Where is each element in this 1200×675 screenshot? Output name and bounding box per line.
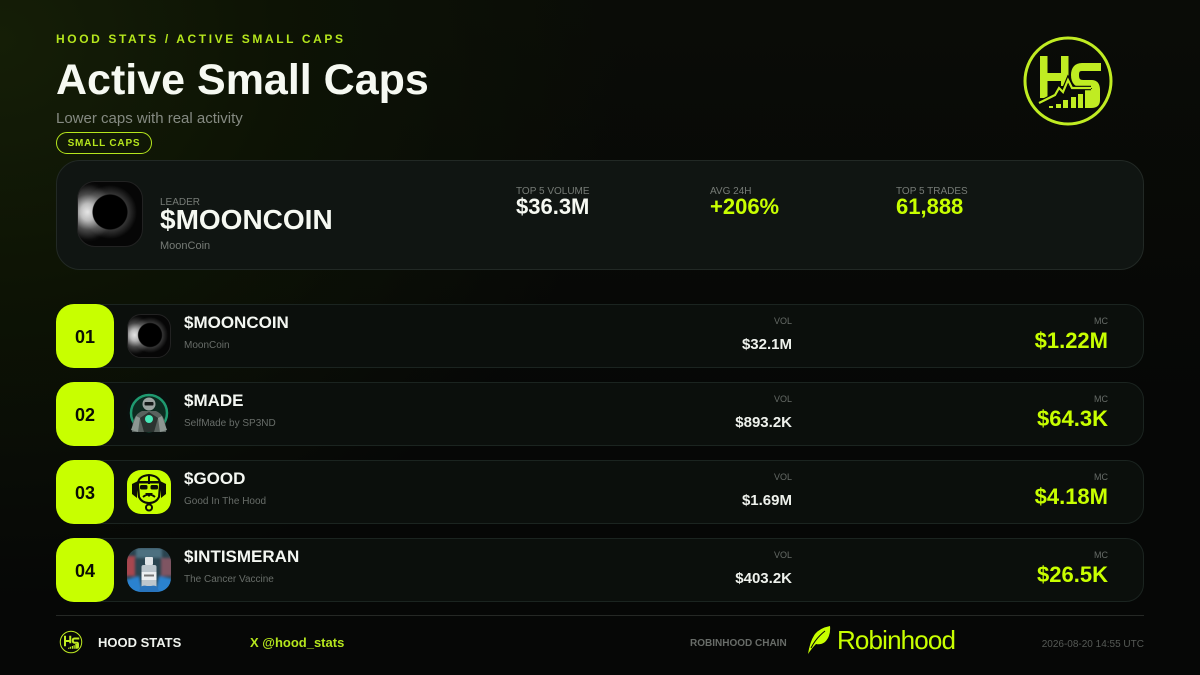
footer timestamp: 2026-08-20 14:55 UTC [1042,639,1144,650]
footer logo [60,630,82,654]
stat: top 5 trades: TOP 5 TRADES [896,186,968,197]
row 01: MC [1094,316,1108,326]
panel: leader card [56,160,1144,270]
row 02: $64.3K [1037,406,1108,431]
row 01: VOL [774,316,792,326]
footer handle: X @hood_stats [250,635,344,650]
row 01 [56,304,1144,368]
row 03: Good In The Hood [184,496,266,507]
wordmark: Robinhood: Robinhood [837,625,955,655]
icon: moon [77,181,143,247]
row 04: $INTISMERAN [184,547,299,566]
stat: avg 24h: AVG 24H [710,186,752,197]
row 02 [56,382,1144,446]
row 01: MoonCoin [184,340,230,351]
row 04: 04 [75,561,95,581]
footer chain label: ROBINHOOD CHAIN [690,638,787,649]
logo: HS mark [1024,36,1112,126]
row 02: $MADE [184,391,244,410]
row 03: $4.18M [1035,484,1108,509]
title: Active Small Caps [56,56,429,104]
row 02: MC [1094,394,1108,404]
row 02: 02 [75,405,95,425]
row 02: VOL [774,394,792,404]
stat: avg 24h: +206% [710,194,779,219]
row 01: $1.22M [1035,328,1108,353]
leader label: LEADER [160,197,200,208]
row 01: $MOONCOIN [184,313,289,332]
row 03: $1.69M [742,492,792,509]
icon: robot [127,392,171,436]
row 03: $GOOD [184,469,245,488]
icon: moon small [127,314,171,358]
icon: dog [127,470,171,514]
chip: small caps: SMALL CAPS [68,138,140,149]
leader name: MoonCoin [160,240,210,252]
row 04: MC [1094,550,1108,560]
leader ticker: $MOONCOIN [160,204,333,235]
row 04: VOL [774,550,792,560]
row 02: $893.2K [735,414,792,431]
icon: vaccine [127,548,171,592]
footer brand: HOOD STATS [98,635,181,650]
row 03 [56,460,1144,524]
stat: top 5 volume: TOP 5 VOLUME [516,186,590,197]
subtitle: Lower caps with real activity [56,110,243,127]
stat: top 5 volume: $36.3M [516,194,589,219]
row 04: $403.2K [735,570,792,587]
row 03: VOL [774,472,792,482]
chip: small caps [56,132,152,154]
stat: top 5 trades: 61,888 [896,194,963,219]
row 04 [56,538,1144,602]
eyebrow: HOOD STATS / ACTIVE SMALL CAPS [56,32,346,46]
row 04: $26.5K [1037,562,1108,587]
footer divider [56,615,1144,616]
row 04: The Cancer Vaccine [184,574,274,585]
row 03: 03 [75,483,95,503]
row 01: $32.1M [742,336,792,353]
icon: feather [808,626,830,654]
row 01: 01 [75,327,95,347]
row 02: SelfMade by SP3ND [184,418,276,429]
row 03: MC [1094,472,1108,482]
